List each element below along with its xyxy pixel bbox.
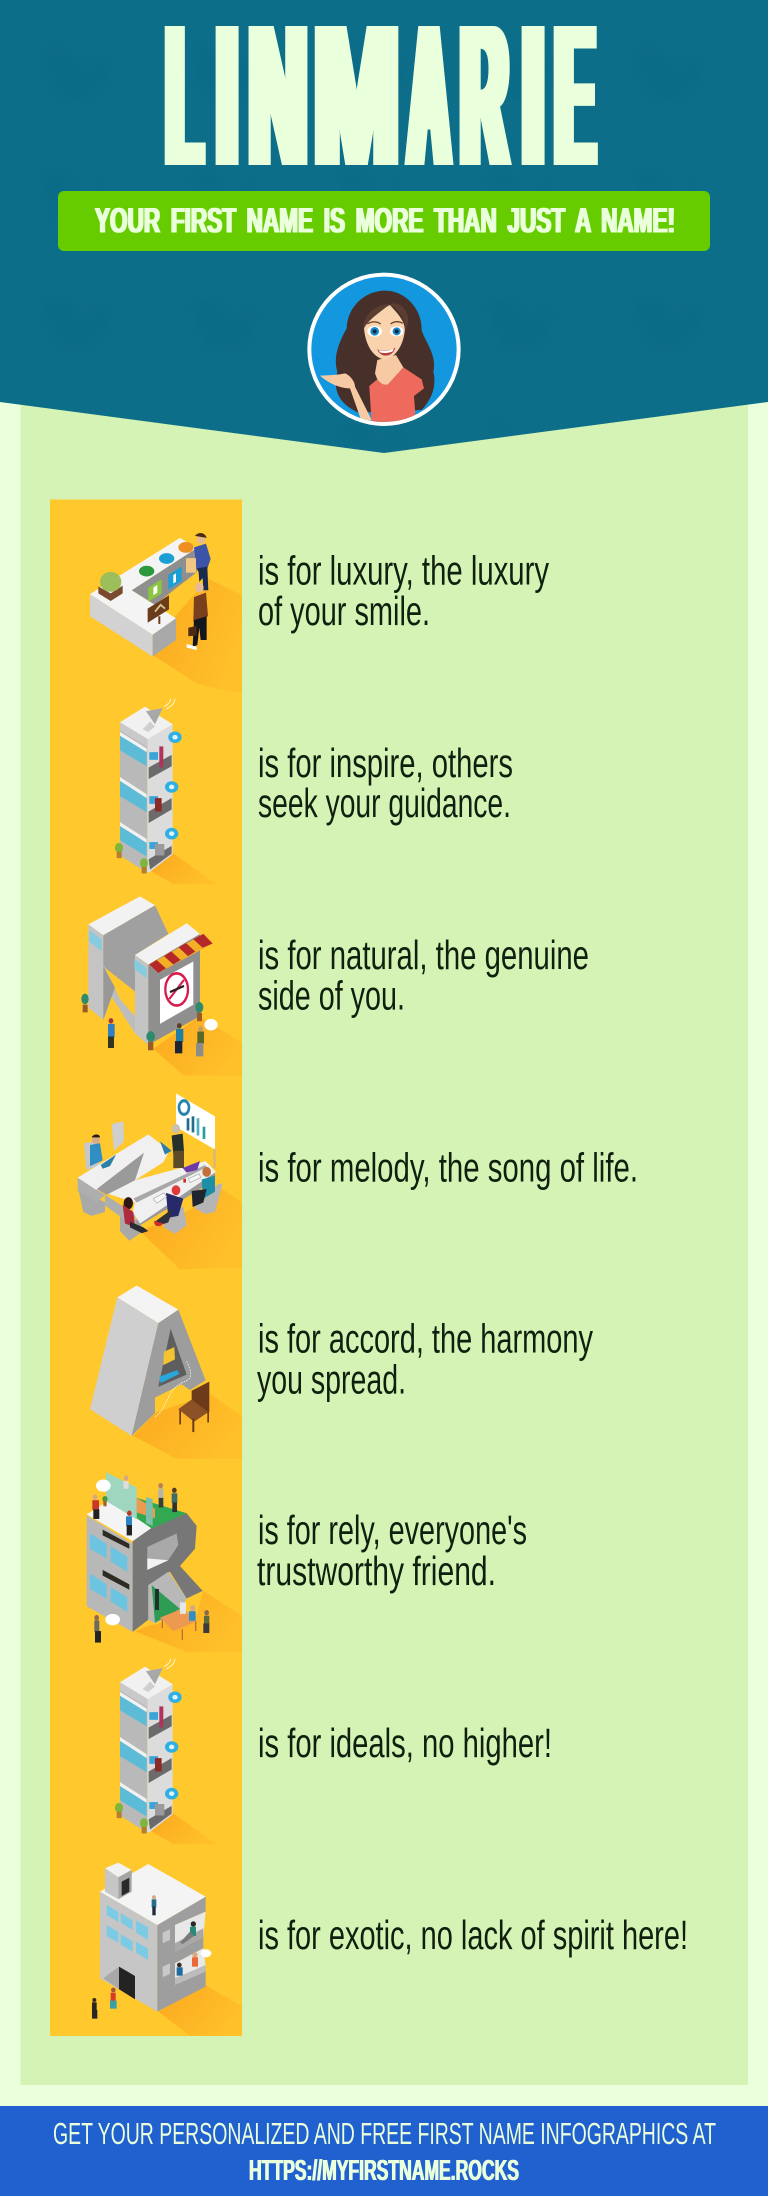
footer: HTTPS://MYFIRSTNAME.ROCKS	[249, 2155, 519, 2187]
icon: letter A computer	[90, 1286, 242, 1459]
text: L	[258, 548, 550, 634]
text: I ideals: is for ideals, no higher!	[258, 1720, 552, 1766]
icon: letter N building	[81, 896, 242, 1076]
icon: letter L recycling counter	[90, 533, 242, 692]
text: I: seek your guidance.	[258, 780, 511, 826]
text: A: you spread.	[257, 1356, 406, 1402]
text: A: is for accord, the harmony	[258, 1316, 594, 1362]
footer	[0, 2106, 768, 2196]
icon: letter M meeting table	[78, 1093, 242, 1269]
subtitle banner	[58, 191, 710, 251]
text: N: side of you.	[258, 972, 405, 1018]
text: R: trustworthy friend.	[257, 1548, 496, 1594]
avatar portrait	[307, 273, 461, 426]
header chevron	[0, 0, 768, 453]
text: A	[257, 1316, 594, 1402]
text: M: is for melody, the song of life.	[258, 1144, 638, 1190]
icon: letter I office tower	[115, 699, 217, 884]
text: L: is for luxury, the luxury	[258, 548, 550, 594]
illustration column	[50, 500, 242, 2036]
text: N: is for natural, the genuine	[258, 932, 589, 978]
content panel	[20, 380, 748, 2085]
text: R	[257, 1507, 527, 1594]
header texture	[0, 0, 768, 446]
text: L: of your smile.	[258, 588, 430, 634]
icon: letter I office tower repeat	[115, 1659, 217, 1844]
text: I	[258, 740, 513, 826]
text: N	[258, 932, 589, 1018]
text: R: is for rely, everyone's	[258, 1507, 527, 1553]
text: I: is for inspire, others	[258, 740, 513, 786]
icon: letter E apartment	[92, 1863, 242, 2036]
icon: letter R office	[87, 1472, 242, 1652]
